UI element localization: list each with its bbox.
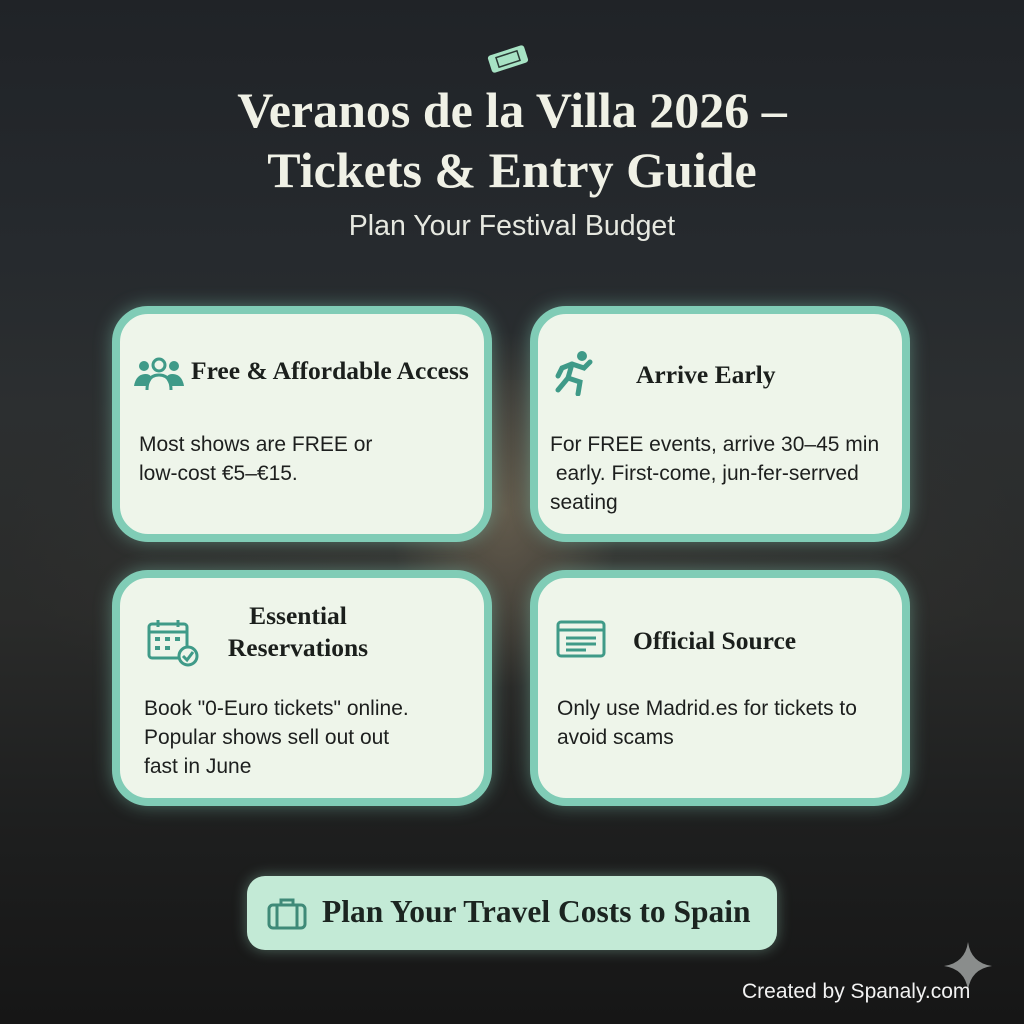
button label: Plan Your Travel Costs to Spain — [322, 894, 751, 929]
text — [557, 697, 857, 749]
icon: suitcase — [268, 898, 306, 930]
text: avoid scams — [557, 726, 674, 749]
icon: runner — [556, 351, 592, 396]
icon: people — [134, 358, 184, 390]
icon: sparkle — [944, 942, 992, 988]
text: seating — [550, 491, 618, 514]
text — [139, 433, 372, 485]
heading: Reservations — [228, 633, 368, 662]
button: plan travel costs — [247, 876, 777, 950]
icon: ticket — [488, 45, 528, 73]
heading: Arrive Early — [636, 360, 776, 389]
text: For FREE events, arrive 30–45 min — [550, 433, 879, 456]
text: Only use Madrid.es for tickets to — [557, 697, 857, 720]
text: fast in June — [144, 755, 251, 778]
heading — [228, 601, 368, 662]
title: Veranos de la Villa 2026 – — [237, 82, 787, 138]
heading: Official Source — [633, 626, 796, 655]
panel: reservations — [112, 570, 492, 806]
panel: arrive early — [530, 306, 910, 542]
text — [550, 433, 879, 514]
text — [144, 697, 409, 778]
text: Most shows are FREE or — [139, 433, 372, 456]
subtitle: Plan Your Festival Budget — [349, 210, 675, 242]
text: early. First-come, jun-fer-serrved — [556, 462, 859, 485]
credit: Created by Spanaly.com — [742, 980, 970, 1003]
heading: Free & Affordable Access — [191, 356, 469, 385]
icon: calendar — [148, 620, 198, 666]
text: Popular shows sell out out — [144, 726, 389, 749]
panel: free access — [112, 306, 492, 542]
text: low-cost €5–€15. — [139, 462, 298, 485]
text: Book "0-Euro tickets" online. — [144, 697, 409, 720]
title: Tickets & Entry Guide — [267, 142, 757, 198]
icon: browser — [556, 620, 606, 658]
title — [237, 82, 788, 198]
heading: Essential — [249, 601, 347, 630]
panel: official source — [530, 570, 910, 806]
